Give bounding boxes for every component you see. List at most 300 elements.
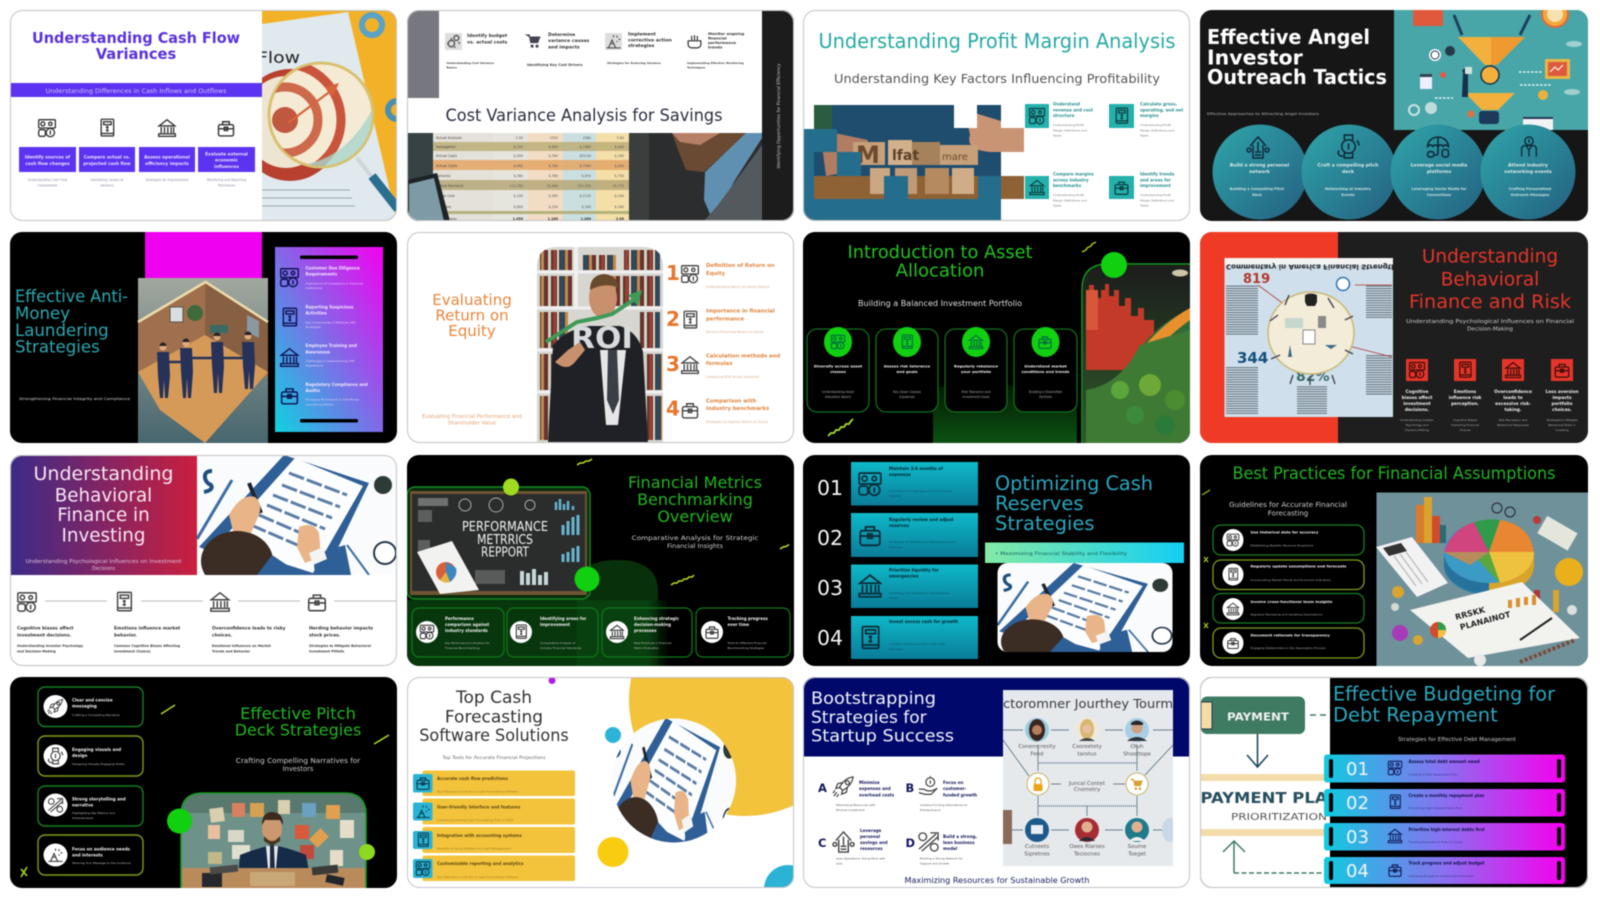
list captions: [706, 285, 770, 424]
tiles: expenses: [889, 472, 911, 477]
points: [1053, 102, 1183, 188]
subtitle: Building a Balanced Investment Portfolio: [858, 299, 1022, 308]
card row: your portfolio: [961, 369, 991, 374]
list boxes: Use historical data for accuracy: [1250, 530, 1319, 534]
photo: cost table and analyst: $,700: [549, 164, 558, 168]
strategy letters: D: [906, 836, 915, 850]
image: pie chart and risk plan: PLANAINOT: [1459, 610, 1512, 632]
bottom cards: Comparative Analysis of: [540, 641, 576, 645]
panel: Introduction to Asset Allocation: [803, 232, 1190, 443]
bottom cards: Key Performance Indicators for: [445, 641, 490, 645]
icon tiles: [1025, 104, 1134, 199]
image: customer journey diagram: Ofuh: [1131, 744, 1143, 750]
points: Cognitive biases affect: [17, 626, 74, 632]
title: Financial Metrics: [628, 473, 762, 492]
points: biases affect: [1402, 395, 1432, 401]
image: customer journey diagram: [1003, 690, 1178, 866]
bottom cards: decision-making: [634, 622, 671, 627]
card row: [807, 327, 1077, 412]
points: Overconfidence: [1494, 389, 1532, 395]
numbers: 03: [817, 576, 843, 600]
tiles: reserves: [889, 523, 909, 528]
step labels: performance: [708, 40, 736, 45]
numbers: [666, 261, 680, 420]
decorative circles: [503, 478, 600, 592]
photo: wooden letter blocks: [803, 105, 1024, 221]
list headings: Importance in financial: [706, 308, 775, 314]
subtitle: [26, 559, 182, 572]
title: Deck Strategies: [235, 720, 361, 740]
strategy labels: Leverage: [860, 828, 882, 833]
list headings: Equity: [706, 271, 726, 277]
captions: [1400, 418, 1578, 432]
gradient list panel: Institutions: [306, 286, 323, 290]
photo: cost table and analyst: 1,280: [581, 217, 592, 221]
tiles: Reserves: [889, 545, 903, 549]
subtitle: Investors: [283, 765, 314, 773]
points: taking.: [1504, 407, 1522, 413]
tiles: [851, 462, 978, 659]
chalkboard: performance metrics report: REPPORT: [481, 546, 529, 560]
strategy labels: personal: [860, 834, 881, 839]
image: customer journey diagram: Conenrcresity: [1018, 744, 1056, 750]
title: [995, 472, 1153, 535]
step boxes: cash flow changes: [25, 161, 70, 167]
circles row: platforms: [1427, 169, 1452, 175]
point captions: Margin Definitions and: [1053, 198, 1087, 202]
list boxes: Focus on audience needs: [72, 846, 131, 852]
point captions: Margin Definitions and: [1140, 198, 1174, 202]
icon: briefcase: [218, 122, 234, 136]
circles row: Attend industry: [1508, 162, 1548, 168]
captions: Strategies to Mitigate: [1546, 418, 1578, 422]
step labels: Monitor ongoing: [708, 31, 744, 36]
card row: Portfolio: [1039, 395, 1052, 399]
point captions: Types: [1139, 204, 1149, 208]
points: decisions.: [1405, 407, 1429, 413]
strategy labels: expenses and: [859, 786, 891, 791]
subtitle: Top Tools for Accurate Financial Projections: [441, 755, 546, 761]
pills: Create a monthly repayment plan: [1408, 793, 1485, 798]
title: Bootstrapping: [811, 689, 936, 709]
title: Investing: [61, 526, 146, 546]
strategy icons: [833, 776, 938, 852]
strategy labels: Minimize: [859, 780, 880, 785]
image: customer journey diagram: Sipretnes: [1024, 852, 1050, 858]
subtitle: [236, 757, 361, 773]
list headings: industry benchmarks: [706, 406, 769, 412]
gradient list panel: Reporting Suspicious: [306, 304, 354, 310]
title: Outreach Tactics: [1207, 65, 1387, 89]
photo: cost table and analyst: 5.00: [617, 136, 624, 140]
panel: Effective Angel Investor Outreach Tactics: [1200, 1, 1588, 221]
title: Reserves: [995, 492, 1084, 515]
captions: Investing: [1555, 428, 1569, 432]
tiles: Importance of Cash Reserves for Financial: [889, 489, 952, 493]
subtitle: Strengthening Financial Integrity and Compliance: [19, 396, 131, 401]
side band: Identifying Opportunities for Financial Efficiency: [776, 63, 782, 168]
list boxes: Tailoring Your Message to the Audience: [71, 861, 131, 865]
points: choices.: [1552, 407, 1572, 413]
title: Return on: [435, 306, 509, 324]
point captions: Understanding Profit: [1140, 123, 1172, 127]
list: User-friendly interface and features: [437, 804, 521, 810]
step boxes: [19, 147, 255, 172]
photo: cost table and analyst: $,970: [582, 174, 591, 178]
subtitle: [422, 414, 522, 426]
points: Cognitive: [1406, 389, 1429, 395]
title: [32, 30, 240, 60]
list: Top Features to Look For in Cash Forecasting Software: [436, 875, 518, 879]
step labels: strategies: [628, 43, 655, 49]
tiles: Prioritize liquidity for: [889, 568, 939, 572]
circles row: Deck: [1252, 193, 1263, 197]
subtitle: Forecasting: [1268, 510, 1308, 518]
step boxes: Assess operational: [144, 154, 190, 160]
step captions: Identifying Key Cost Drivers: [527, 63, 583, 67]
image: market chart landscape: [1083, 265, 1190, 443]
pills: Track progress and adjust budget: [1408, 860, 1485, 866]
subtitle: Effective Approaches to Attracting Angel Investors: [1207, 111, 1319, 116]
list boxes: narrative: [72, 802, 94, 808]
numbers: 1: [666, 261, 680, 285]
list: Comparing Leading Cash Forecasting Tools in 2025: [437, 818, 514, 822]
list boxes: Engaging visuals and: [72, 747, 121, 752]
subtitle band: Understanding Differences in Cash Inflows and Outflows: [46, 88, 226, 95]
title: Finance and Risk: [1409, 292, 1571, 313]
title: [628, 473, 762, 526]
title: Debt Repayment: [1333, 704, 1498, 726]
pills: Prioritizing High-Interest Debts First: [1408, 806, 1463, 810]
captions: [17, 644, 371, 654]
image: customer journey diagram: Soume: [1128, 844, 1147, 850]
squiggle top: [1082, 242, 1096, 252]
title: Laundering: [15, 321, 109, 340]
panel: Evaluating Return on Equity: [422, 246, 780, 443]
teal corner circle: [764, 865, 812, 900]
captions: Identifying Causes of: [91, 178, 124, 182]
captions: Understanding Investor Psychology: [17, 644, 84, 648]
tiles: Reserves: [889, 647, 903, 651]
list boxes: Clear and concise: [72, 698, 113, 702]
numbers: 04: [817, 626, 843, 650]
title: Effective Anti-: [15, 287, 128, 306]
points: across industry: [1053, 178, 1089, 182]
captions: [28, 178, 246, 188]
strategy labels: model: [943, 846, 958, 851]
list: [413, 770, 575, 881]
strategy captions: Less: [836, 862, 843, 866]
pills: 02: [1346, 793, 1369, 814]
icon row: [18, 592, 397, 612]
list: Integration with accounting systems: [437, 833, 522, 838]
step labels: [467, 31, 744, 50]
card row: Assess risk tolerance: [884, 364, 931, 368]
list boxes: [38, 687, 143, 875]
pills: Tracking Expenses to Free Up Funds: [1408, 840, 1463, 844]
list: Accurate cash flow predictions: [437, 776, 508, 781]
side band: [762, 10, 794, 221]
title: Understanding: [1422, 246, 1558, 268]
bottom cards: processes: [634, 628, 657, 633]
photo: cost table and analyst: $,1980: [579, 145, 591, 149]
bottom cards: Benchmarking Strategies: [728, 646, 765, 650]
captions: and Decision-Making: [17, 650, 56, 654]
points: portfolio: [1552, 401, 1573, 407]
card row: Diversify across asset: [814, 364, 862, 368]
subtitle: Understanding Psychological Influences on Investment: [26, 559, 182, 565]
chalkboard: performance metrics report: METRRICS: [477, 533, 533, 548]
photo: cost table and analyst: $,250: [549, 205, 558, 209]
icon tiles: [1406, 359, 1573, 381]
step labels: Implement: [628, 32, 657, 38]
image: financial infographic: 344: [1237, 349, 1268, 367]
strategy letters: [818, 781, 915, 850]
photo: cost table and analyst: $,450: [514, 154, 523, 158]
card row: Key Asset Classes: [893, 390, 921, 394]
list headings: Comparison with: [706, 398, 756, 404]
title: Cost Variance Analysis for Savings: [446, 106, 723, 126]
list headings: Definition of Return on: [706, 263, 775, 269]
circles row: Events: [1341, 193, 1355, 197]
circles row: Networking at Industry: [1325, 187, 1372, 191]
yellow blob: [629, 584, 861, 816]
point captions: Margin Definitions and: [1140, 128, 1174, 132]
title: [1333, 682, 1556, 726]
image: customer journey diagram: ctoromner Jourthey Tourm: [1003, 696, 1173, 711]
title: [34, 464, 174, 546]
title: Effective Pitch: [240, 704, 356, 723]
tiles: Invest excess cash for growth: [889, 619, 958, 624]
points: Compare margins: [1053, 172, 1094, 176]
bottom cards: Best Practices in Financial: [634, 641, 672, 645]
photo: signing a document: [197, 455, 397, 591]
photo: cost table and analyst: $,900: [514, 164, 523, 168]
list boxes: Crafting a Compelling Narrative: [72, 713, 120, 717]
image: customer journey diagram: Shoottope: [1123, 752, 1152, 758]
card row: Explained: [899, 395, 915, 399]
points: operating, and net: [1140, 108, 1183, 112]
captions: Investment Choices: [114, 650, 151, 654]
list boxes: [1213, 525, 1364, 658]
point captions: [1052, 123, 1174, 208]
captions: Understanding Cash Flow: [28, 178, 68, 182]
point captions: Understanding Profit: [1053, 123, 1085, 127]
step boxes: Identify sources of: [25, 154, 70, 160]
circles row: [1212, 124, 1576, 220]
step labels: and impacts: [548, 44, 580, 50]
subtitle: [1229, 501, 1347, 518]
captions: Trends and Behavior: [212, 650, 251, 654]
panel: Top Cash Forecasting Software Solutions: [407, 584, 861, 900]
title: Optimizing Cash: [995, 472, 1153, 495]
strategy labels: savings and: [860, 840, 888, 845]
title: Strategies: [15, 338, 100, 356]
list boxes: Designing Visually Engaging Slides: [72, 762, 125, 766]
title: [1207, 25, 1387, 89]
step boxes: economic: [215, 158, 238, 164]
title: [432, 291, 512, 340]
title: Introduction to Asset: [848, 242, 1032, 263]
bottom cards: [412, 608, 790, 657]
card row: Investment Goals: [962, 395, 990, 399]
photo: cost table and analyst: $,7580: [579, 164, 591, 168]
panel: Bootstrapping Strategies for Startup Success: [803, 677, 1190, 888]
pills: [1324, 754, 1565, 884]
step labels: vs. actual costs: [467, 40, 507, 46]
pills: 03: [1346, 827, 1369, 848]
circles row: Craft a compelling pitch: [1318, 162, 1378, 168]
photo: cost table and analyst: 1,180: [548, 217, 559, 221]
image: customer journey diagram: Juncal Contet: [1068, 781, 1105, 787]
gradient list panel: Requirements: [306, 272, 338, 276]
image: pie chart and risk plan: RRSKK: [1454, 605, 1487, 622]
gradient list panel: Key Components of Effective AML: [306, 320, 356, 324]
card row: Regularly rebalance: [954, 364, 998, 368]
subtitle: Comparative Analysis for Strategic: [632, 534, 759, 542]
bottom cards: Identifying areas for: [540, 616, 586, 621]
image: financial infographic: 82%: [1296, 369, 1330, 385]
title: Benchmarking: [637, 490, 753, 509]
captions: Impacting Financial: [1451, 423, 1479, 427]
image: customer journey diagram: Teciocnes: [1073, 852, 1100, 858]
photo: signing a document: [998, 563, 1172, 664]
title: Equity: [448, 322, 496, 340]
step boxes: influences: [214, 164, 239, 170]
bottom cards: Tracking progress: [728, 616, 768, 621]
title: Behavioral: [55, 486, 152, 506]
frame: [1082, 264, 1190, 443]
points: Identify trends: [1140, 172, 1175, 176]
step labels: Identify budget: [467, 33, 508, 39]
image: customer journey diagram: tarotus: [1077, 752, 1097, 758]
numbers: 01: [817, 476, 843, 500]
pills: Assess total debt amount owed: [1408, 759, 1480, 764]
panel: Cost Variance Analysis for Savings: [407, 10, 794, 221]
title: Money: [15, 304, 70, 323]
list headings: Calculation methods and: [706, 354, 780, 360]
strategy captions: Entrepreneurs: [920, 808, 941, 812]
illustration: payment plan prioritization: PRIORITIZATION: [1231, 812, 1327, 823]
photo: wooden letter blocks: lfat: [892, 148, 919, 164]
photo: cost table and analyst: 153,290: [577, 184, 591, 188]
list: Top Features to Look For in Cash Forecasting Software: [436, 790, 518, 794]
tiles: Common Mistakes to Avoid with Cash: [889, 642, 945, 646]
circles row: Crafting Personalized: [1509, 187, 1552, 191]
photo: cost table and analyst: $,180: [582, 205, 591, 209]
icon: book: [101, 119, 114, 136]
title: [15, 287, 128, 356]
tiles: Stability: [889, 494, 902, 498]
gradient list panel: Audits: [306, 388, 321, 393]
panel: Optimizing Cash Reserves Strategies: [803, 455, 1190, 666]
step captions: [446, 61, 744, 70]
list headings: [706, 263, 780, 412]
circles row: networking events: [1504, 169, 1552, 175]
list headings: performance: [706, 316, 745, 322]
panel: Understanding Profit Margin Analysis: [802, 32, 1184, 222]
illustration: payment plan prioritization: PAYMENT PLA: [1200, 789, 1328, 807]
strategy letters: C: [818, 836, 826, 850]
bottom cards: Metric Evaluation: [634, 646, 659, 650]
title: Investor: [1207, 46, 1304, 70]
card row: Understand market: [1024, 364, 1067, 368]
list boxes: Highlighting Key Metrics and: [72, 811, 115, 815]
gradient list panel: Challenges in Implementing AML: [306, 359, 355, 363]
title: Effective Angel: [1207, 25, 1370, 49]
title: Understanding Cash Flow: [32, 30, 240, 47]
gradient list panel: Awareness: [306, 350, 331, 354]
title: Understanding: [34, 464, 174, 485]
strategy labels: Build a strong,: [943, 834, 977, 839]
image: customer journey diagram: Oaex Rlarses: [1069, 844, 1105, 850]
title: Variances: [96, 46, 177, 63]
panel: Financial Metrics Benchmarking Overview: [407, 455, 794, 666]
photo: cost table and analyst: $,100: [615, 194, 624, 198]
pills: Prioritize high-interest debts first: [1408, 827, 1485, 832]
photo: wooden letter blocks: mare: [942, 152, 968, 163]
bottom cards: industry standards: [445, 628, 488, 633]
list captions: Understanding Return on Equity Metrics: [706, 285, 770, 289]
numbers: 02: [817, 526, 843, 550]
points: behavior.: [114, 632, 137, 638]
photo: cost table and analyst: Actual Costs: [436, 154, 457, 158]
strategy captions: Lean Operations: Doing More with: [836, 856, 885, 860]
points: [1402, 389, 1579, 413]
circles row: Build a strong personal: [1230, 162, 1290, 168]
gradient list panel: Emerging Techniques in Anti-Money: [306, 398, 359, 402]
points: leads to: [1503, 395, 1523, 401]
photo: man with ROI sign in library: [537, 247, 663, 443]
subtitle: [1406, 319, 1575, 332]
title: Behavioral: [1441, 270, 1539, 290]
title: Finance in: [57, 505, 150, 526]
photo: cost table and analyst: $,565: [549, 194, 558, 198]
photo: cost table and analyst: $,000: [615, 164, 624, 168]
bottom cards: improvement: [540, 622, 570, 627]
card row: conditions and trends: [1022, 369, 1070, 374]
icons row: [445, 33, 701, 50]
image: financial infographic: 819: [1243, 272, 1270, 287]
points: excessive risk-: [1495, 401, 1531, 407]
title: [811, 689, 954, 746]
strategy letters: A: [818, 781, 827, 795]
photo: cost table and analyst: $,750: [615, 174, 624, 178]
title: [848, 242, 1032, 282]
bottom cards: Industry Financial Standards: [540, 646, 582, 650]
image: customer journey diagram: Cutneets: [1025, 844, 1049, 850]
gradient list panel: Customer Due Diligence: [306, 266, 360, 270]
subtitle: Understanding Psychological Influences on Financial: [1406, 319, 1575, 325]
chalkboard: performance metrics report: PERFORMANCE: [462, 520, 548, 535]
gradient list panel: Laundering Efforts: [306, 402, 334, 406]
panel: Best Practices for Financial Assumptions: [1200, 455, 1588, 666]
circles row: deck: [1342, 169, 1355, 175]
points: improvement: [1140, 183, 1171, 188]
bottom cards: over time: [728, 622, 749, 627]
subtitle: Crafting Compelling Narratives for: [236, 757, 361, 765]
bottom cards: Enhancing strategic: [634, 616, 680, 621]
gradient list panel: Employee Training and: [306, 343, 357, 348]
title: Evaluating: [432, 291, 512, 309]
photo: cost table and analyst: 113,700: [509, 184, 523, 188]
captions: Techniques: [217, 184, 235, 188]
step captions: Techniques: [687, 66, 705, 70]
list headings: formulas: [706, 361, 732, 367]
numbers: 2: [666, 307, 680, 331]
pills: Adjusting Budget for Unexpected Expenses: [1408, 874, 1474, 878]
list boxes: design: [72, 753, 87, 758]
